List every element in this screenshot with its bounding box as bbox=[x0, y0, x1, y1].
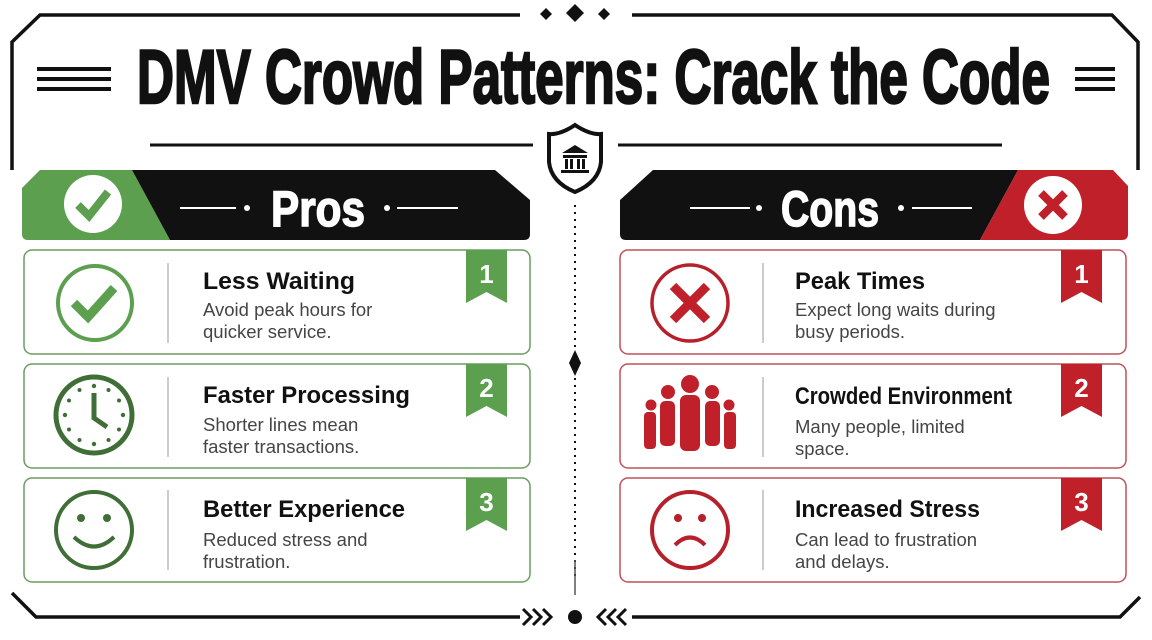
pros card 1: quicker service. bbox=[203, 321, 332, 342]
pros card 3: Reduced stress and bbox=[203, 529, 368, 550]
pros card 1 bbox=[24, 250, 530, 354]
bottom frame bbox=[12, 593, 1140, 617]
center divider bbox=[569, 205, 581, 595]
ribbon 1: 1 bbox=[1074, 259, 1089, 289]
pros card 3: Better Experience bbox=[203, 496, 405, 523]
cons card 1: Peak Times bbox=[795, 268, 925, 295]
ribbon 3: 3 bbox=[1074, 487, 1089, 517]
ribbon 3: 3 bbox=[479, 487, 494, 517]
icon: x in circle bbox=[1024, 176, 1082, 234]
pros header bbox=[22, 170, 530, 240]
pros card 2: Faster Processing bbox=[203, 382, 410, 409]
ribbon 2: 2 bbox=[479, 373, 494, 403]
icon: crowd bbox=[644, 375, 736, 451]
cons card 3: Increased Stress bbox=[795, 496, 980, 523]
ribbon 3 bbox=[1061, 478, 1102, 531]
frame top bbox=[12, 15, 1138, 170]
icon: shield with building bbox=[549, 125, 601, 192]
icon: smiley bbox=[56, 492, 132, 568]
ribbon 1 bbox=[466, 250, 507, 303]
icon: clock bbox=[56, 377, 132, 453]
cons card 3: Can lead to frustration bbox=[795, 529, 977, 550]
pros card 2: faster transactions. bbox=[203, 436, 359, 457]
cons card 1: busy periods. bbox=[795, 321, 905, 342]
pros card 2 bbox=[24, 364, 530, 468]
pros card 1: Less Waiting bbox=[203, 268, 355, 295]
ribbon 1 bbox=[1061, 250, 1102, 303]
pros card 2: Shorter lines mean bbox=[203, 414, 358, 435]
ribbon 1: 1 bbox=[479, 259, 494, 289]
bottom chevrons and dot bbox=[523, 609, 626, 625]
icon: x circle bbox=[652, 265, 728, 341]
cons card 1: Expect long waits during bbox=[795, 299, 996, 320]
pros header: Pros bbox=[271, 181, 365, 237]
cons card 1 bbox=[620, 250, 1126, 354]
top diamonds bbox=[540, 4, 610, 22]
hamburger left bbox=[37, 69, 111, 89]
cons card 3: and delays. bbox=[795, 551, 890, 572]
ribbon 3 bbox=[466, 478, 507, 531]
icon: check in circle bbox=[64, 175, 122, 233]
icon: sad face bbox=[652, 492, 728, 568]
cons header: Cons bbox=[781, 181, 879, 237]
cons card 2 bbox=[620, 364, 1126, 468]
pros card 3: frustration. bbox=[203, 551, 290, 572]
hamburger right bbox=[1075, 69, 1115, 89]
title underline bbox=[150, 144, 1002, 146]
icon: check circle bbox=[58, 266, 132, 340]
ribbon 2 bbox=[466, 364, 507, 417]
pros card 1: Avoid peak hours for bbox=[203, 299, 372, 320]
ribbon 2 bbox=[1061, 364, 1102, 417]
cons card 2: Many people, limited bbox=[795, 416, 965, 437]
pros card 3 bbox=[24, 478, 530, 582]
cons card 2: space. bbox=[795, 438, 850, 459]
cons card 2: Crowded Environment bbox=[795, 383, 1012, 410]
ribbon 2: 2 bbox=[1074, 373, 1089, 403]
cons header bbox=[620, 170, 1128, 240]
cons card 3 bbox=[620, 478, 1126, 582]
